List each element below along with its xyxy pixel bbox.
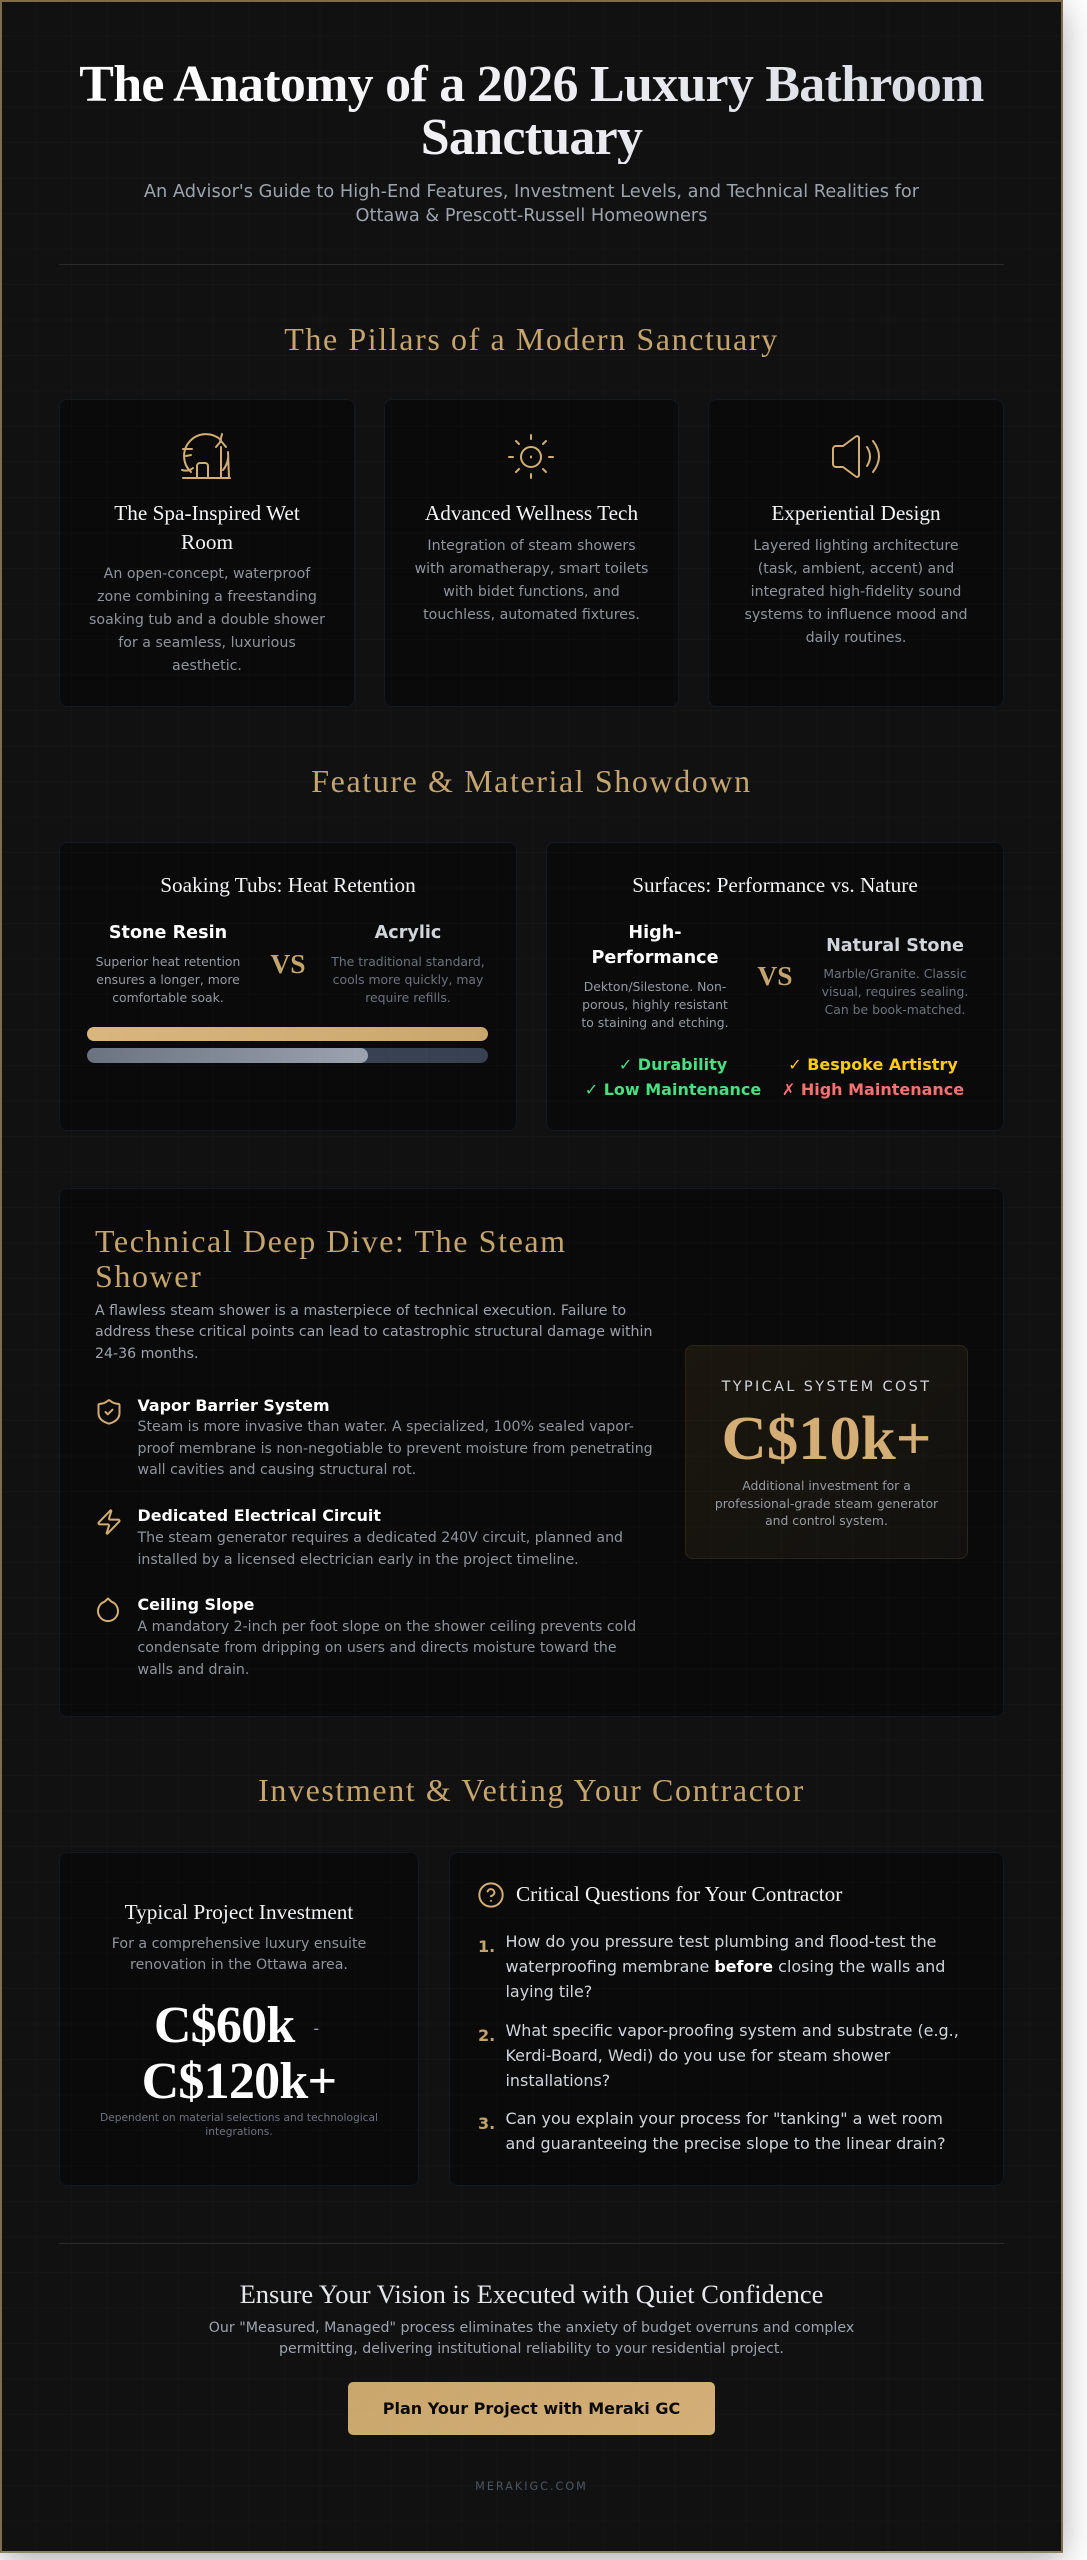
subtitle <box>144 182 920 226</box>
call to action text: Our "Measured, Managed" process eliminates the anxiety of budget overruns and complex <box>209 2320 854 2336</box>
heading: pillars: The Pillars of a Modern Sanctuary <box>284 320 779 356</box>
stone resin heading: Stone Resin <box>109 923 227 943</box>
acrylic text <box>331 954 485 1005</box>
heading: showdown: Feature & Material Showdown <box>311 763 752 799</box>
note <box>100 2110 378 2138</box>
pros: performance <box>585 1055 761 1099</box>
pros and cons: natural stone: ✗ High Maintenance <box>782 1080 964 1099</box>
question 3: Can you explain your process for "tanking" a wet room <box>506 2109 943 2128</box>
investment range <box>142 1996 336 2110</box>
subtitle: Ottawa & Prescott-Russell Homeowners <box>356 206 707 226</box>
high-performance heading: Performance <box>591 948 718 968</box>
bar: stone resin <box>87 1027 488 1041</box>
card text <box>745 538 967 646</box>
heading: investment: Investment & Vetting Your Contractor <box>258 1772 805 1808</box>
icon: lightning <box>98 1509 120 1535</box>
card text: An open-concept, waterproof <box>104 566 310 582</box>
high-performance heading: High- <box>628 923 682 943</box>
high-performance text: to staining and etching. <box>581 1015 729 1030</box>
item title: Dedicated Electrical Circuit <box>138 1506 381 1525</box>
card text: touchless, automated fixtures. <box>423 607 640 623</box>
note: integrations. <box>205 2125 273 2138</box>
question 1: laying tile? <box>506 1982 592 2001</box>
callout text: and control system. <box>765 1513 888 1528</box>
footer url: MERAKIGC.COM <box>475 2480 588 2493</box>
note: Dependent on material selections and technological <box>100 2110 378 2124</box>
callout label: TYPICAL SYSTEM COST <box>722 1379 931 1395</box>
card text: soaking tub and a double shower <box>89 612 325 628</box>
panel title: Soaking Tubs: Heat Retention <box>160 873 416 897</box>
high-performance text <box>581 979 729 1030</box>
icon: question <box>478 1882 504 1908</box>
natural stone text: Can be book-matched. <box>825 1002 965 1017</box>
question 3 number: 3. <box>478 2114 495 2132</box>
investment range: C$60k - <box>154 1996 319 2054</box>
high-performance text: Dekton/Silestone. Non- <box>584 979 726 994</box>
icon: sun <box>508 434 554 479</box>
stone resin text: comfortable soak. <box>112 990 224 1005</box>
item text: Steam is more invasive than water. A specialized, 100% sealed vapor- <box>138 1419 634 1435</box>
intro text <box>95 1303 652 1362</box>
natural stone text: Marble/Granite. Classic <box>823 966 967 981</box>
card text <box>89 566 325 674</box>
intro text: A flawless steam shower is a masterpiece of technical execution. Failure to <box>95 1303 626 1319</box>
panel title: Surfaces: Performance vs. Nature <box>632 873 918 897</box>
panel text: renovation in the Ottawa area. <box>130 1956 348 1972</box>
subtitle: An Advisor's Guide to High-End Features, Investment Levels, and Technical Realities for <box>144 182 919 202</box>
panel: surfaces <box>546 842 1004 1131</box>
item text <box>138 1619 636 1678</box>
versus label: VS <box>757 960 793 991</box>
card text: Layered lighting architecture <box>753 538 959 554</box>
acrylic heading: Acrylic <box>375 923 441 943</box>
panel heading: Technical Deep Dive: The Steam <box>95 1223 567 1259</box>
card text: integrated high-fidelity sound <box>751 584 961 600</box>
icon: speaker <box>832 435 880 478</box>
item text <box>138 1419 653 1478</box>
question 1: How do you pressure test plumbing and flood-test the <box>506 1932 936 1951</box>
panel heading <box>95 1223 567 1294</box>
card title <box>114 500 300 554</box>
acrylic text: cools more quickly, may <box>333 972 483 987</box>
item text: wall cavities and causing structural rot. <box>138 1462 416 1478</box>
investment range: C$120k+ <box>142 2052 336 2110</box>
callout value: C$10k+ <box>722 1403 931 1473</box>
panel text <box>112 1936 366 1972</box>
question 2 <box>506 2021 959 2090</box>
pros: performance: ✓ Low Maintenance <box>585 1080 761 1099</box>
icon: ceiling slope <box>97 1598 119 1622</box>
card title: Experiential Design <box>771 500 941 524</box>
stone resin text <box>96 954 240 1005</box>
question 3 <box>506 2109 946 2153</box>
card text: Integration of steam showers <box>427 538 636 554</box>
item text: The steam generator requires a dedicated 240V circuit, planned and <box>138 1530 623 1546</box>
intro text: 24-36 months. <box>95 1346 198 1362</box>
panel title: Typical Project Investment <box>125 1900 353 1924</box>
bar: acrylic <box>87 1048 488 1063</box>
card text: systems to influence mood and <box>745 607 967 623</box>
item text: installed by a licensed electrician early in the project timeline. <box>138 1552 579 1568</box>
high-performance heading <box>591 923 718 968</box>
natural stone text: visual, requires sealing. <box>822 984 968 999</box>
stone resin text: ensures a longer, more <box>96 972 240 987</box>
natural stone text <box>822 966 968 1017</box>
card title: Room <box>181 530 233 554</box>
card text: (task, ambient, accent) and <box>758 561 954 577</box>
call to action text: permitting, delivering institutional reliability to your residential project. <box>279 2341 784 2357</box>
question 2: What specific vapor-proofing system and substrate (e.g., <box>506 2021 959 2040</box>
callout text <box>715 1478 938 1528</box>
panel text: For a comprehensive luxury ensuite <box>112 1936 366 1952</box>
panel title: Critical Questions for Your Contractor <box>516 1882 842 1906</box>
panel: technical deep dive <box>59 1188 1004 1717</box>
question 1: waterproofing membrane before closing the walls and <box>506 1957 945 1976</box>
call to action heading: Ensure Your Vision is Executed with Quiet Confidence <box>240 2278 823 2308</box>
title: The Anatomy of a 2026 Luxury Bathroom <box>79 56 984 113</box>
panel: soaking tubs <box>59 842 517 1131</box>
pros and cons: natural stone: ✓ Bespoke Artistry <box>788 1055 958 1074</box>
card title: The Spa-Inspired Wet <box>114 500 300 524</box>
button <box>348 2382 715 2435</box>
item title: Ceiling Slope <box>138 1594 254 1614</box>
stone resin text: Superior heat retention <box>96 954 240 969</box>
title: Sanctuary <box>421 109 642 166</box>
panel: project investment <box>59 1852 419 2186</box>
card text: for a seamless, luxurious <box>118 635 296 651</box>
panel: experiential design <box>708 399 1004 707</box>
item text: proof membrane is non-negotiable to prevent moisture from penetrating <box>138 1441 653 1457</box>
call to action text <box>209 2320 854 2357</box>
question 2: installations? <box>506 2071 610 2090</box>
card text <box>415 538 648 623</box>
panel: critical questions <box>449 1852 1004 2186</box>
callout text: professional-grade steam generator <box>715 1496 938 1510</box>
acrylic text: The traditional standard, <box>331 954 485 969</box>
card text: with aromatherapy, smart toilets <box>415 561 648 577</box>
pros and cons: natural stone <box>782 1055 964 1099</box>
item text <box>137 1530 623 1568</box>
item text: condensate from dripping on users and directs moisture toward the <box>138 1640 617 1656</box>
high-performance text: porous, highly resistant <box>582 997 728 1012</box>
title <box>60 58 1003 164</box>
item title: Vapor Barrier System <box>138 1396 330 1415</box>
question 1 <box>506 1932 945 2001</box>
item text: A mandatory 2-inch per foot slope on the shower ceiling prevents cold <box>138 1619 636 1635</box>
callout: system cost <box>685 1345 968 1559</box>
question 2 number: 2. <box>478 2026 495 2044</box>
card text: zone combining a freestanding <box>97 589 317 605</box>
card title: Advanced Wellness Tech <box>425 500 638 524</box>
panel heading: Shower <box>95 1258 202 1294</box>
panel: spa-inspired wet room <box>59 399 355 707</box>
card text: with bidet functions, and <box>443 584 620 600</box>
panel: advanced wellness tech <box>384 399 679 707</box>
button: Plan Your Project with Meraki GC <box>383 2399 680 2418</box>
item text: walls and drain. <box>138 1662 249 1678</box>
icon: shield check <box>98 1399 120 1425</box>
pros: performance: ✓ Durability <box>619 1055 727 1074</box>
acrylic text: require refills. <box>365 990 451 1005</box>
callout text: Additional investment for a <box>742 1478 911 1493</box>
question 1 number: 1. <box>478 1936 495 1956</box>
question 3: and guaranteeing the precise slope to the linear drain? <box>506 2134 946 2153</box>
versus label: VS <box>270 948 306 979</box>
card text: daily routines. <box>806 630 906 646</box>
intro text: address these critical points can lead to catastrophic structural damage within <box>95 1324 652 1340</box>
icon: dome spa <box>181 433 231 479</box>
natural stone heading: Natural Stone <box>826 936 964 956</box>
question 2: Kerdi-Board, Wedi) do you use for steam shower <box>506 2046 890 2065</box>
card text: aesthetic. <box>172 658 242 674</box>
